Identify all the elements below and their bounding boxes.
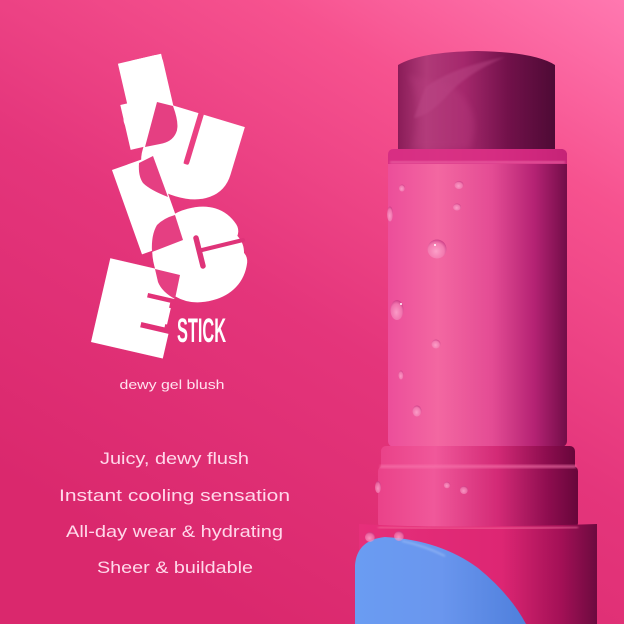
feature: sheer: Sheer & buildable [97,558,253,577]
logo letter I: I [93,128,203,280]
logo: JUICE STICK: STICK [177,312,226,350]
feature list [59,449,290,577]
product: blush stick [355,51,597,624]
logo letter E: E [87,243,183,374]
logo letter C: C [149,192,247,317]
logo letter J: J [113,41,183,160]
subtitle: dewy gel blush: dewy gel blush [120,377,224,392]
case body [388,149,567,447]
feature: juicy flush: Juicy, dewy flush [100,449,249,468]
feature: all-day wear: All-day wear & hydrating [66,522,283,541]
logo: JUICE STICK [87,41,247,374]
water droplets [365,181,468,542]
logo letter U: U [138,95,240,214]
case base [359,524,597,624]
gel bullet [398,51,555,152]
feature: cooling: Instant cooling sensation [59,486,290,505]
case tier [378,446,578,528]
logo overlap cut-outs [139,102,183,299]
blue cap [355,537,526,624]
